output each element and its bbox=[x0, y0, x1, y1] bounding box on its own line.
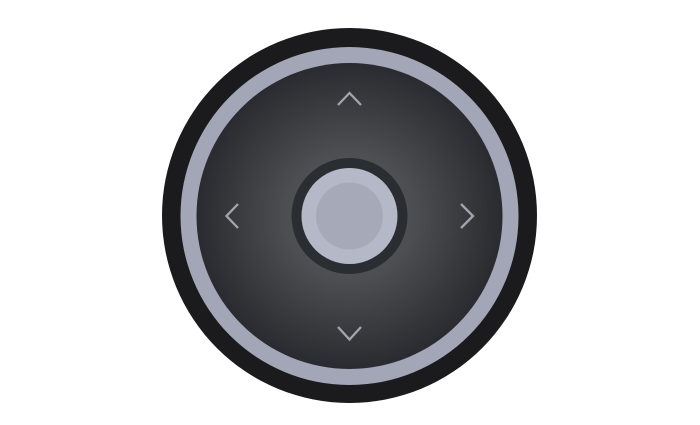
center button bbox=[292, 158, 408, 274]
icon: up arrow bbox=[338, 93, 361, 105]
icon: right arrow bbox=[461, 204, 473, 228]
light grey ring bbox=[180, 47, 518, 385]
dark dial face bbox=[196, 63, 502, 369]
icon: left arrow bbox=[226, 204, 238, 228]
icon: down arrow bbox=[338, 327, 361, 340]
outer black ring bbox=[162, 28, 537, 403]
